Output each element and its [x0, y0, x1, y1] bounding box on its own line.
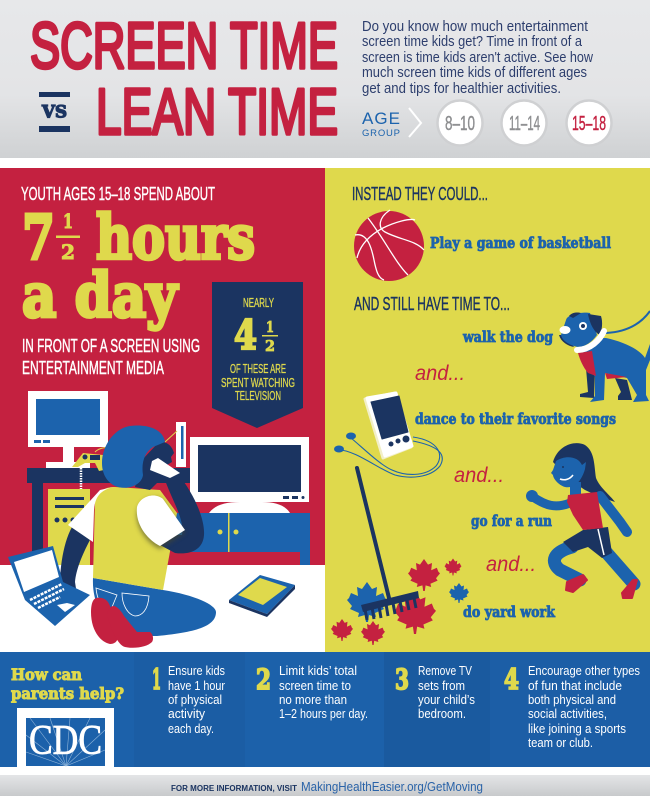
tip 1: of physical: [168, 693, 222, 707]
red shoes: [91, 598, 153, 648]
chevron arrow: [409, 108, 421, 137]
activity: basketball: Play a game of basketball: [430, 235, 611, 252]
icon: music player with earbuds: [334, 393, 442, 477]
age button 8-10: [438, 100, 482, 146]
age group label: GROUP: [362, 128, 400, 139]
tip 2: [256, 663, 368, 721]
panel: screen time red: [0, 168, 325, 652]
tip 2: 1–2 hours per day.: [279, 707, 368, 721]
tip 4: [504, 663, 640, 750]
curly cord: [80, 468, 82, 489]
tip 1: Ensure kids: [168, 664, 225, 678]
face: [135, 442, 174, 490]
heading: how can parents help: parents help?: [11, 684, 124, 703]
intro paragraph: much screen time kids of different ages: [362, 65, 587, 81]
laptop: [8, 546, 90, 626]
television: [190, 437, 309, 513]
tip 3: Remove TV: [418, 664, 473, 678]
activity: walk the dog: walk the dog: [462, 329, 553, 346]
tip 3: your child’s: [418, 693, 475, 707]
game console: [165, 422, 186, 467]
title: screen time: SCREEN TIME: [30, 9, 338, 82]
heading: how can parents help: How can: [11, 665, 82, 684]
intro paragraph: Do you know how much entertainment: [362, 19, 588, 35]
callout banner: OF THESE ARE: [230, 362, 286, 376]
big stat: hours: 7: [22, 201, 55, 274]
callout banner: TELEVISION: [235, 389, 281, 403]
callout banner: SPENT WATCHING: [221, 376, 295, 390]
logo: cdc: CDC: [29, 718, 102, 764]
computer monitor: [28, 391, 108, 468]
computer tower: [48, 489, 90, 565]
logo: cdc: [17, 708, 114, 775]
intro paragraph: get and tips for healthier activities.: [362, 81, 561, 97]
age group label: AGE: [362, 109, 400, 128]
illustration: teen with screens: [0, 391, 325, 652]
desk: [27, 468, 192, 565]
jeans: [93, 578, 216, 636]
heading: instead they could: INSTEAD THEY COULD...: [352, 184, 488, 204]
age group label: [362, 109, 400, 139]
intro paragraph: [362, 19, 593, 97]
right arm: [160, 474, 204, 553]
vs badge: [39, 92, 70, 132]
big stat: hours: 1: [63, 209, 73, 233]
panel: how can parents help: [0, 652, 650, 775]
big stat: hours: a day: [22, 260, 178, 332]
tip 2: Limit kids’ total: [279, 664, 357, 678]
subheading: ENTERTAINMENT MEDIA: [22, 358, 164, 378]
tip 4: social activities,: [528, 707, 607, 721]
header panel: [0, 0, 650, 158]
subheading: [22, 336, 200, 378]
activity: yard work: do yard work: [463, 604, 556, 621]
age button 15-18: 15–18: [572, 113, 606, 135]
big stat: hours: hours: [96, 202, 255, 274]
age button 8-10: 8–10: [445, 113, 475, 135]
tip 2: 2: [256, 663, 271, 696]
callout banner: 2: [265, 337, 275, 355]
tip 1: each day.: [168, 722, 214, 736]
yellow shirt: [93, 487, 177, 590]
callout banner: 1: [266, 318, 274, 336]
tip 3: sets from: [418, 679, 465, 693]
tip 4: team or club.: [528, 736, 593, 750]
title: lean time: LEAN TIME: [96, 75, 338, 148]
tv cabinet: [175, 513, 310, 565]
left arm: [60, 527, 90, 605]
age button 11-14: 11–14: [509, 113, 540, 135]
and connector 2: and...: [454, 464, 504, 487]
intro paragraph: screen is time kids aren't active. See how: [362, 50, 593, 66]
tablet: [229, 575, 295, 617]
vs badge: VS: [41, 102, 67, 122]
game controller: [72, 447, 112, 471]
tip 1: activity: [168, 707, 206, 721]
tip 3: bedroom.: [418, 707, 466, 721]
subheading: IN FRONT OF A SCREEN USING: [22, 336, 200, 356]
big stat: hours: [22, 201, 255, 332]
footer link: MakingHealthEasier.org/GetMoving: [301, 779, 483, 794]
tip 4: like joining a sports: [528, 722, 626, 736]
panel: lean time yellow: [325, 168, 650, 652]
big stat: hours: 2: [61, 240, 75, 264]
heading: and still have time: AND STILL HAVE TIME TO...: [354, 294, 510, 314]
icon: basketball: [354, 210, 424, 281]
activity: go for a run: go for a run: [471, 513, 552, 530]
age button 15-18: [566, 100, 612, 146]
tip 4: of fun that include: [528, 679, 622, 693]
icon: running girl: [526, 443, 637, 598]
icon: dog: [559, 311, 650, 402]
hair: [102, 426, 165, 488]
intro paragraph: screen time kids get? Time in front of a: [362, 34, 583, 50]
tip 2: no more than: [279, 693, 347, 707]
and connector 3: and...: [486, 553, 536, 576]
activity: dance: dance to their favorite songs: [415, 411, 616, 428]
floor: [0, 565, 325, 652]
footer label: FOR MORE INFORMATION, VISIT: [171, 784, 297, 793]
lead-in heading: YOUTH AGES 15–18 SPEND ABOUT: [21, 184, 215, 204]
tip 1: 1: [152, 663, 161, 696]
callout banner: 4: [234, 312, 257, 359]
right sleeve: [137, 496, 185, 549]
callout banner: [212, 282, 303, 428]
tip 4: 4: [504, 663, 519, 696]
left sleeve: [68, 487, 114, 542]
tip 3: [395, 663, 475, 721]
tip 3: 3: [395, 663, 409, 696]
icon: rake and leaves: [331, 468, 469, 645]
footer bar: [0, 767, 650, 796]
tip 4: both physical and: [528, 693, 616, 707]
tip 2: screen time to: [279, 679, 351, 693]
and connector 1: and...: [415, 362, 465, 385]
tip 1: have 1 hour: [168, 679, 225, 693]
tip 1: [152, 663, 225, 736]
callout banner: NEARLY: [243, 296, 274, 310]
heading: how can parents help: [11, 665, 124, 703]
age button 11-14: [502, 100, 546, 146]
phone: [150, 458, 180, 478]
